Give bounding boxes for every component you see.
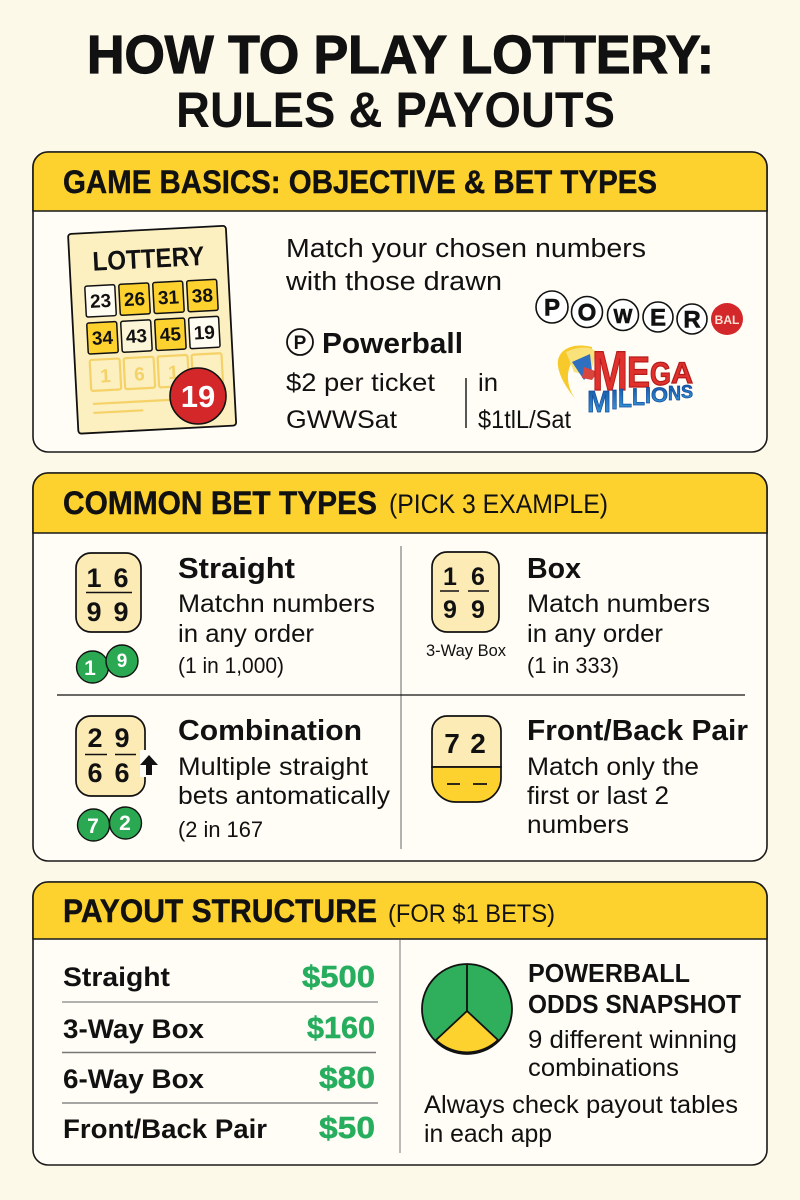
text: straight: (1 in 1,000) (178, 653, 284, 678)
heading: powerball odds snapshot (528, 958, 741, 1019)
icon: lottery ticket: 19 (181, 379, 215, 414)
icon: lottery ticket (68, 226, 236, 434)
icon: powerball circled P (287, 329, 313, 355)
text: front/back pair: numbers (527, 811, 629, 839)
icon: lottery ticket: LOTTERY (92, 241, 205, 277)
logo: powerball: E (650, 304, 666, 332)
text: combination (178, 715, 391, 842)
icon: green balls 7 and 2 (78, 807, 142, 841)
table: payouts: $500 (302, 959, 375, 994)
icon: lottery ticket: 19 (193, 322, 215, 345)
icon: lottery ticket: 26 (123, 289, 146, 311)
logo: powerball: O (578, 300, 596, 326)
logo: mega millions (558, 339, 693, 419)
logo: mega millions: E (627, 348, 650, 397)
table: payouts: Straight (63, 962, 170, 992)
icon: front/back slip (432, 716, 501, 802)
icon: green balls 1 and 9: 1 (84, 657, 96, 680)
icon: lottery ticket: 31 (157, 287, 180, 309)
panel header: payout structure: (FOR $1 BETS) (388, 900, 555, 928)
logo: mega millions: A (671, 357, 693, 390)
text: mega millions details: $1tlL/Sat (478, 406, 571, 434)
panel header: common bet types: (PICK 3 EXAMPLE) (389, 489, 608, 519)
label: 3-way box: 3-Way Box (426, 641, 506, 660)
text: check payout tables: Always check payout tables (424, 1091, 738, 1119)
heading: powerball: Powerball (322, 328, 463, 360)
icon: straight slip: 9 (86, 597, 102, 627)
table: payouts: $160 (307, 1010, 375, 1045)
text: box: Box (527, 553, 581, 585)
icon: lottery ticket: 1 (100, 366, 112, 387)
logo: mega millions: M (587, 384, 611, 419)
logo: powerball (536, 291, 743, 335)
table: payouts: $50 (319, 1110, 375, 1145)
text: objective: with those drawn (285, 268, 502, 296)
icon: straight slip: 6 (113, 563, 129, 593)
panel header: common bet types: COMMON BET TYPES (63, 485, 377, 521)
panel header: game basics: GAME BASICS: OBJECTIVE & BET TYPES (63, 164, 657, 200)
panel header: payout structure (33, 882, 767, 939)
panel header: game basics (33, 152, 767, 211)
text: box: (1 in 333) (527, 653, 619, 678)
logo: powerball: P (544, 294, 560, 322)
logo: powerball: W (614, 306, 633, 328)
table: payouts: Front/Back Pair (63, 1114, 268, 1144)
icon: box slip (432, 552, 499, 632)
icon: lottery ticket: 6 (134, 364, 145, 386)
text: combination: Multiple straight (178, 753, 368, 781)
logo: mega millions: M (592, 339, 628, 402)
text: front/back pair (527, 715, 748, 839)
icon: green balls 1 and 9 (76, 645, 138, 683)
icon: green balls 7 and 2: 2 (119, 812, 131, 835)
icon: lottery ticket: 1 (168, 362, 180, 384)
icon: combination slip with arrow: 6 (87, 758, 103, 788)
panel: game basics (33, 152, 767, 452)
icon: lottery ticket: 23 (89, 291, 112, 313)
text: powerball details: $2 per ticket (286, 369, 435, 397)
text: box (527, 553, 710, 678)
text: straight (178, 553, 375, 678)
logo: mega millions: O (651, 384, 668, 407)
text: check payout tables: in each app (424, 1120, 552, 1148)
logo: mega millions: L (632, 384, 645, 411)
text: straight: Matchn numbers (178, 590, 375, 618)
icon: combination slip with arrow: 6 (114, 758, 130, 788)
icon: combination slip with arrow: 9 (114, 723, 130, 753)
text: powerball details: GWWSat (286, 406, 397, 434)
icon: combination slip with arrow: 2 (87, 723, 103, 753)
icon: green balls 7 and 2: 7 (87, 815, 99, 838)
text: mega millions details: in (478, 369, 498, 397)
icon: lottery ticket: 43 (125, 326, 148, 348)
bet: box (426, 552, 710, 678)
text: box: in any order (527, 620, 663, 648)
text: powerball details (286, 369, 435, 434)
logo: mega millions: I (611, 384, 618, 415)
panel: common bet types (33, 473, 767, 861)
table: payouts (62, 959, 378, 1145)
bet: straight (76, 553, 375, 683)
text: check payout tables (424, 1091, 738, 1148)
logo: mega millions: S (681, 382, 693, 402)
text: combination: (2 in 167 (178, 817, 263, 842)
logo: powerball: BAL (715, 313, 739, 327)
icon: green balls 1 and 9: 9 (117, 651, 127, 672)
text: objective: Match your chosen numbers (286, 235, 646, 263)
bet: combination (76, 715, 391, 842)
text: winning combinations: combinations (528, 1054, 679, 1082)
table: payouts: $80 (319, 1060, 375, 1095)
text: combination: Combination (178, 715, 362, 747)
icon: front/back slip: 2 (470, 728, 486, 759)
text: winning combinations (528, 1026, 737, 1082)
text: straight: in any order (178, 620, 314, 648)
text: front/back pair: Match only the (527, 753, 699, 781)
panel: payout structure (33, 882, 767, 1165)
panel header: common bet types (33, 473, 767, 533)
bet: front/back pair (432, 715, 748, 839)
text: front/back pair: first or last 2 (527, 782, 669, 810)
heading: powerball odds snapshot: POWERBALL (528, 958, 690, 988)
icon: box slip: 1 (443, 563, 457, 591)
logo: powerball: R (683, 306, 701, 334)
icon: straight slip (76, 553, 141, 632)
text: straight: Straight (178, 553, 295, 585)
text: front/back pair: Front/Back Pair (527, 715, 748, 747)
chart: odds pie (422, 964, 512, 1054)
icon: straight slip: 9 (113, 597, 129, 627)
icon: lottery ticket: 45 (159, 324, 182, 346)
title: RULES & PAYOUTS (176, 82, 615, 138)
text: combination: bets antomatically (178, 782, 391, 810)
logo: mega millions: I (645, 383, 651, 408)
logo: mega millions: G (650, 356, 671, 392)
icon: box slip: 9 (471, 596, 485, 624)
icon: front/back slip: 7 (444, 728, 460, 759)
text: mega millions details (466, 369, 571, 434)
text: winning combinations: 9 different winning (528, 1026, 737, 1054)
text: objective (285, 235, 646, 296)
heading: powerball odds snapshot: ODDS SNAPSHOT (528, 989, 741, 1019)
logo: mega millions: L (618, 383, 632, 413)
table: payouts: 3-Way Box (63, 1014, 204, 1044)
icon: box slip: 9 (443, 596, 457, 624)
title: HOW TO PLAY LOTTERY: (87, 25, 714, 85)
icon: lottery ticket: 34 (91, 328, 114, 350)
table: payouts: 6-Way Box (63, 1064, 204, 1094)
icon: combination slip with arrow (76, 716, 158, 796)
logo: mega millions: N (668, 383, 681, 405)
icon: lottery ticket: 38 (191, 286, 214, 308)
text: box: Match numbers (527, 590, 710, 618)
icon: powerball circled P: P (294, 333, 307, 354)
icon: box slip: 6 (471, 563, 485, 591)
panel header: payout structure: PAYOUT STRUCTURE (63, 893, 377, 929)
icon: straight slip: 1 (86, 563, 102, 593)
title (87, 25, 714, 138)
